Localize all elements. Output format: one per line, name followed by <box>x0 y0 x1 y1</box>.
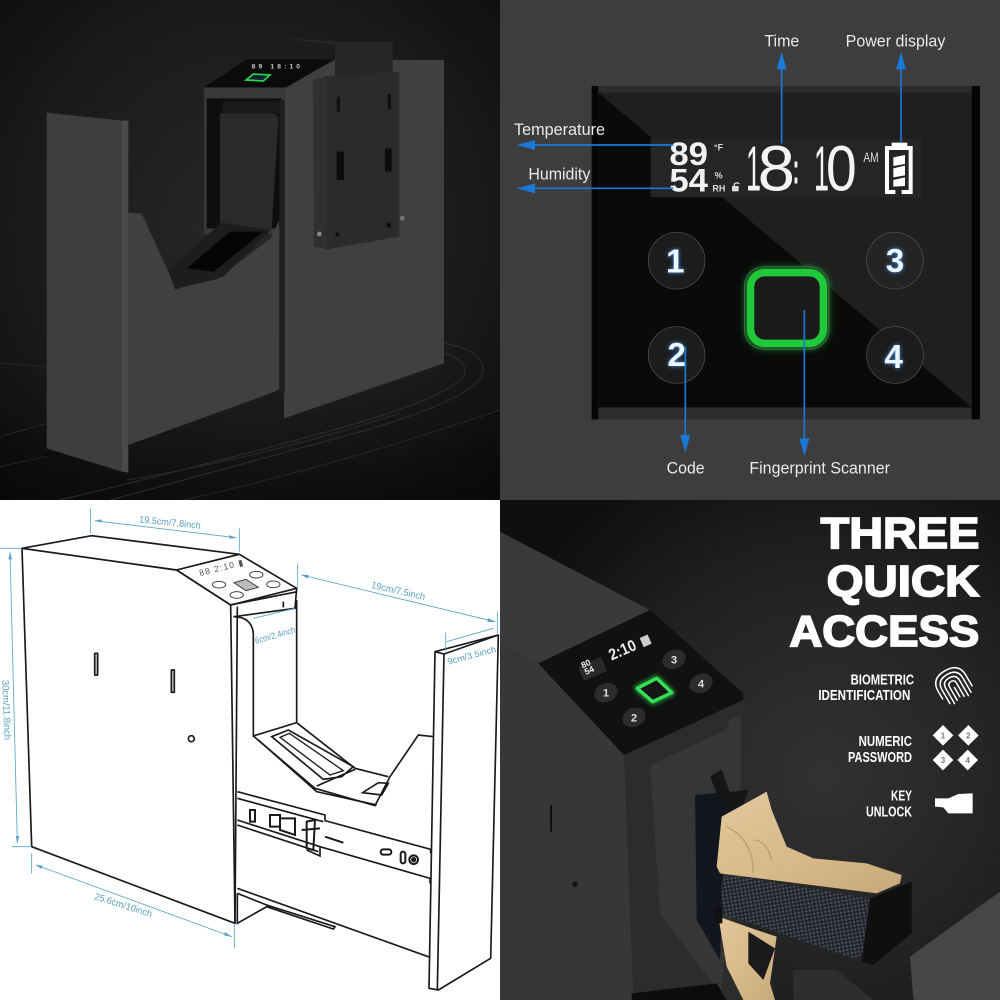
key 3: 3 <box>886 243 904 280</box>
right drawer panel <box>429 635 498 990</box>
drawer base <box>793 970 873 1000</box>
LCD display <box>651 132 922 204</box>
label: panel width: 9cm/3.5inch <box>446 644 497 667</box>
keypad drawing: 88 2:10 ▮ <box>198 557 244 578</box>
keypad: 2 <box>631 712 637 724</box>
key 2: 2 <box>667 337 686 374</box>
key 1: 1 <box>666 244 685 281</box>
dimension lines <box>0 508 497 948</box>
label: Humidity: Humidity <box>528 164 591 183</box>
slide rail holes <box>381 849 418 864</box>
pull-out tray <box>168 223 271 289</box>
icon: fingerprint <box>931 663 975 708</box>
corner of drawer panel <box>910 892 1000 1000</box>
heading <box>789 510 979 656</box>
arrows <box>517 52 906 456</box>
keypad: 80 <box>579 657 592 670</box>
key 4: 4 <box>884 339 903 376</box>
mounting bracket <box>277 38 405 249</box>
heading: ACCESS <box>789 608 979 656</box>
safe body <box>500 532 650 1000</box>
key 4: 4 <box>884 339 903 376</box>
keypad: 1 <box>603 688 609 700</box>
panel: control panel diagram <box>500 0 1000 500</box>
key 1 <box>648 232 705 289</box>
icon: lock <box>733 183 739 191</box>
LCD display: 1 <box>814 132 829 204</box>
label: numeric password: PASSWORD <box>848 750 912 766</box>
key 2: 2 <box>667 337 686 374</box>
keypad top: 89 18:10 <box>252 64 300 71</box>
key 3 <box>867 232 923 289</box>
LCD display: 1 <box>746 132 761 204</box>
keypad drawing <box>198 557 280 598</box>
rear frame and opening <box>204 87 287 234</box>
icon: number diamonds: 2 <box>966 731 971 740</box>
keypad top <box>204 59 333 87</box>
heading: QUICK <box>827 558 979 606</box>
icon: number diamonds: 4 <box>965 756 970 765</box>
drawer outline <box>233 588 434 957</box>
label: Code: Code <box>667 458 705 477</box>
LCD display: : <box>793 145 799 193</box>
icon: number diamonds: 3 <box>941 756 946 765</box>
label: key unlock: KEY <box>891 789 912 805</box>
icon: key <box>935 793 973 813</box>
keypad: 4 <box>698 678 705 690</box>
heading: THREE <box>821 510 979 558</box>
key 3: 3 <box>886 243 904 280</box>
LCD display: 8 <box>758 132 795 204</box>
LCD display: AM <box>863 149 879 165</box>
panel: dimensions line drawing <box>0 500 500 1000</box>
fingerprint scanner <box>744 267 829 349</box>
label: top width: 19.5cm/7.8inch <box>139 514 201 532</box>
keypad <box>538 610 743 755</box>
safe front opening <box>624 697 748 1000</box>
label: Temperature: Temperature <box>514 120 605 139</box>
icon: number diamonds <box>933 725 979 770</box>
label: depth: 25.6cm/10inch <box>93 891 153 920</box>
label: numeric password <box>848 734 912 766</box>
glass keypad <box>592 86 980 419</box>
LCD display: RH <box>712 184 725 194</box>
keypad: 3 <box>671 654 677 666</box>
LCD display: 89 <box>669 136 708 172</box>
label: key unlock: UNLOCK <box>866 805 912 821</box>
label: opening width: 6cm/2.4inch <box>254 625 296 646</box>
LCD display: 0 <box>826 132 857 204</box>
label: key unlock <box>866 789 912 821</box>
LCD display: % <box>715 171 723 181</box>
main safe body <box>279 60 444 418</box>
main body <box>22 536 297 923</box>
icon: battery <box>885 143 913 194</box>
LCD display: °F <box>714 143 724 153</box>
LCD display: 54 <box>669 163 708 199</box>
handgun <box>710 769 912 1000</box>
key 2 <box>648 327 705 383</box>
panel: safe product photo <box>0 0 500 500</box>
shadow under drawer <box>247 388 285 418</box>
label: biometric identification: IDENTIFICATION <box>818 688 910 704</box>
label: numeric password: NUMERIC <box>859 734 912 750</box>
label: drawer travel: 19cm/7.5inch <box>370 580 426 603</box>
key 1: 1 <box>666 244 685 281</box>
label: biometric identification <box>818 672 914 704</box>
panel: three quick access <box>500 500 1000 1000</box>
label: biometric identification: BIOMETRIC <box>851 672 914 688</box>
key 4 <box>867 327 923 383</box>
drawer side <box>128 213 279 445</box>
keypad: 2:10 <box>606 637 639 664</box>
label: Power display: Power display <box>846 32 946 51</box>
icon: number diamonds: 1 <box>941 731 946 740</box>
keypad: 54 <box>583 664 596 677</box>
label: Fingerprint Scanner: Fingerprint Scanner <box>749 458 890 477</box>
left drawer front panel <box>47 113 128 473</box>
label: Time: Time <box>764 32 799 51</box>
